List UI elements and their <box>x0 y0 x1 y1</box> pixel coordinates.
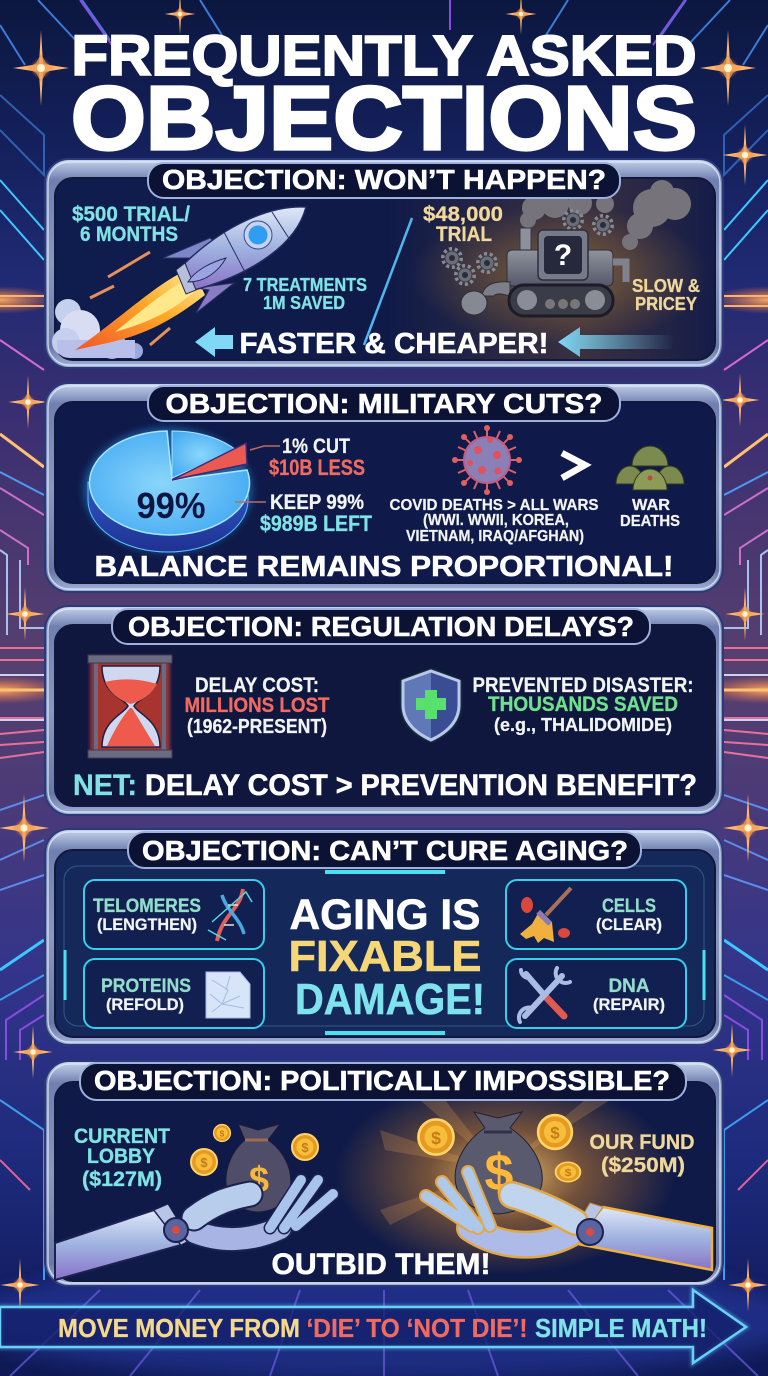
title <box>71 24 697 169</box>
text: covid comparison: VIETNAM, IRAQ/AFGHAN) <box>406 528 584 545</box>
text: slow and pricey: SLOW & <box>632 276 700 296</box>
bottom arrow banner <box>0 1290 746 1363</box>
text: prevented disaster: (e.g., THALIDOMIDE) <box>494 715 672 735</box>
card: proteins: PROTEINS <box>101 976 191 997</box>
text: our fund: ($250M) <box>601 1154 685 1177</box>
arrow right <box>558 327 674 357</box>
heading pill: OBJECTION: WON’T HAPPEN? <box>162 164 606 195</box>
icon: shield <box>402 670 460 741</box>
icon: tools <box>519 968 570 1022</box>
pointer lines <box>235 446 280 502</box>
icon: large money bag <box>455 1112 542 1214</box>
text: one percent cut: 1% CUT <box>282 435 350 458</box>
coins: left <box>191 1125 318 1175</box>
heading pill: OBJECTION: MILITARY CUTS? <box>166 388 602 419</box>
text: slow and pricey: PRICEY <box>635 294 697 314</box>
heading pill: OBJECTION: POLITICALLY IMPOSSIBLE? <box>94 1065 670 1096</box>
text: expensive trial: TRIAL <box>436 223 492 246</box>
title: FREQUENTLY ASKED <box>72 24 696 88</box>
text: keep 99 percent: $989B LEFT <box>260 511 372 536</box>
text: delay cost: DELAY COST: <box>195 674 319 697</box>
icon: virus <box>452 425 522 495</box>
text: prevented disaster: PREVENTED DISASTER: <box>472 674 694 697</box>
text: prevented disaster <box>472 674 694 735</box>
text: delay cost <box>184 674 330 738</box>
icon: machine <box>410 180 710 345</box>
icon: machine: ? <box>554 239 572 272</box>
text: current lobby: LOBBY <box>87 1145 155 1168</box>
panel: politically impossible <box>45 1061 723 1286</box>
card: proteins: (REFOLD) <box>106 995 184 1014</box>
symbol: greater than <box>562 453 585 478</box>
text: one percent cut: $10B LESS <box>269 455 365 480</box>
icon: helmets <box>616 446 684 490</box>
card: proteins <box>84 959 264 1028</box>
text: keep 99 percent <box>260 491 372 536</box>
conclusion: DELAY COST > PREVENTION BENEFIT? <box>145 769 697 802</box>
text: war deaths <box>620 497 680 530</box>
text: cheap trial: 6 MONTHS <box>80 223 178 246</box>
card: cells: CELLS <box>602 896 656 917</box>
coins: right <box>418 1115 580 1182</box>
text: delay cost: MILLIONS LOST <box>184 694 330 717</box>
card: telomeres <box>84 880 264 949</box>
icon: crumpled sheet <box>206 972 250 1018</box>
conclusion: OUTBID THEM! <box>272 1248 490 1281</box>
clouds <box>52 299 143 359</box>
text: prevented disaster: THOUSANDS SAVED <box>488 693 678 716</box>
text: treatments: 7 TREATMENTS <box>243 275 367 295</box>
text: war deaths: WAR <box>632 497 670 514</box>
pie chart <box>84 428 252 552</box>
icon: dna <box>208 889 252 941</box>
panel: regulation delays <box>45 606 723 815</box>
text: cheap trial: $500 TRIAL/ <box>72 203 190 226</box>
text: keep 99 percent: KEEP 99% <box>270 491 364 514</box>
panel: won't happen <box>45 159 723 368</box>
headline: FIXABLE <box>288 932 482 981</box>
text: delay cost: (1962-PRESENT) <box>187 716 327 738</box>
heading pill: OBJECTION: CAN’T CURE AGING? <box>142 835 628 866</box>
text: cheap trial <box>72 203 190 246</box>
icon: hourglass <box>88 655 172 758</box>
text: covid comparison: (WWI. WWII, KOREA, <box>423 512 569 529</box>
card: cells <box>506 880 686 949</box>
card: dna: DNA <box>608 976 650 997</box>
conclusion: FASTER & CHEAPER! <box>240 328 548 360</box>
card: telomeres: (LENGTHEN) <box>97 915 197 934</box>
text: our fund <box>590 1131 694 1177</box>
panel: military cuts <box>45 383 723 592</box>
divider <box>364 218 412 345</box>
text: expensive trial: $48,000 <box>423 203 503 226</box>
icon: large money bag: $ <box>485 1144 514 1202</box>
pie chart: 99% <box>136 485 206 526</box>
text: current lobby: ($127M) <box>82 1168 162 1191</box>
card: dna: (REPAIR) <box>593 995 665 1014</box>
icon: left robot arm <box>55 1180 333 1280</box>
title: OBJECTIONS <box>71 69 697 169</box>
text: current lobby: CURRENT <box>74 1125 170 1148</box>
text: call to action: MOVE MONEY FROM <box>58 1313 300 1343</box>
conclusion: BALANCE REMAINS PROPORTIONAL! <box>94 551 674 583</box>
text: call to action: ‘DIE’ TO ‘NOT DIE’! <box>306 1313 528 1343</box>
arrow left <box>195 327 233 357</box>
text: one percent cut <box>269 435 365 480</box>
panel: cure aging <box>45 829 723 1045</box>
headline: AGING IS <box>290 891 480 939</box>
icon: right robot arm <box>426 1172 712 1270</box>
text: treatments: 1M SAVED <box>263 293 345 313</box>
icon: rocket <box>75 207 306 350</box>
icon: broom <box>520 888 571 943</box>
text: our fund: OUR FUND <box>590 1131 694 1154</box>
text: war deaths: DEATHS <box>620 513 680 530</box>
card: cells: (CLEAR) <box>596 915 662 934</box>
text: current lobby <box>74 1125 170 1191</box>
heading pill: OBJECTION: REGULATION DELAYS? <box>128 611 634 642</box>
text: covid comparison <box>390 497 599 545</box>
icon: small money bag: $ <box>249 1159 269 1200</box>
text: call to action <box>58 1313 707 1343</box>
card: dna <box>506 959 686 1028</box>
conclusion: NET: <box>73 769 137 802</box>
icon: small money bag <box>226 1124 291 1212</box>
headline <box>288 891 485 1024</box>
headline: DAMAGE! <box>295 975 485 1024</box>
text: slow and pricey <box>632 276 700 314</box>
text: expensive trial <box>423 203 503 246</box>
card: telomeres: TELOMERES <box>93 896 201 917</box>
text: covid comparison: COVID DEATHS > ALL WARS <box>390 497 599 514</box>
text: call to action: SIMPLE MATH! <box>535 1313 707 1343</box>
text: treatments <box>243 275 367 313</box>
